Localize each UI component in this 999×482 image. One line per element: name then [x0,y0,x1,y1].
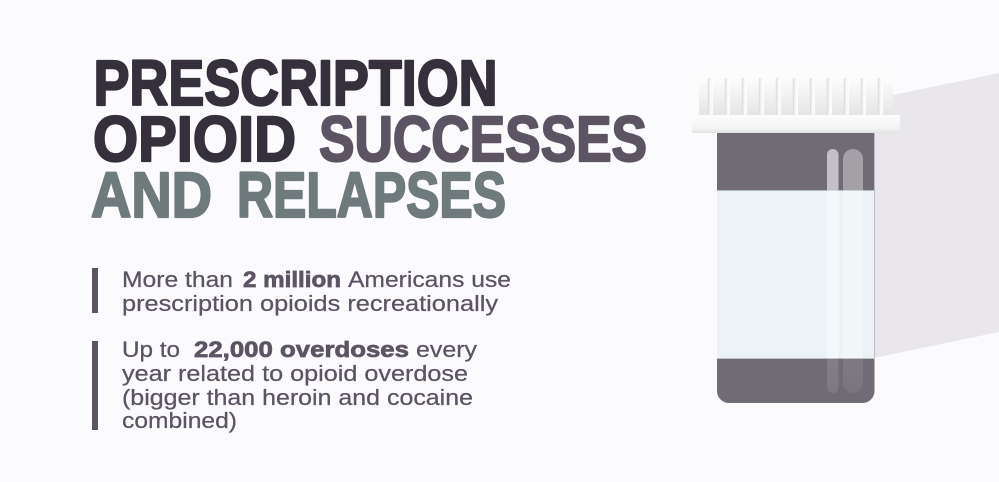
title [91,47,647,231]
fact text: Up to [122,337,180,362]
fact text: 22,000 overdoses [194,337,409,362]
title: SUCCESSES [319,103,647,175]
title: OPIOID [93,103,296,175]
title: AND [91,159,212,231]
fact: 22,000 overdoses [92,337,477,433]
cap [692,66,900,133]
bottle shadow [874,73,999,358]
fact text [122,337,477,433]
accent bar [92,341,98,430]
fact text: combined) [122,408,237,433]
fact text: More than [122,267,233,292]
bottle highlights [827,149,863,393]
fact text [122,267,511,316]
fact text: every [416,337,477,362]
title: RELAPSES [237,159,506,231]
bottle body [717,133,874,403]
fact text: Americans use [348,267,511,292]
cap top [699,66,893,115]
fact: 2 million Americans [92,267,511,316]
cap ring [692,115,900,133]
label [717,190,874,358]
fact text: prescription opioids recreationally [122,291,498,316]
fact text: year related to opioid overdose [122,361,468,386]
cap ridges [707,78,883,115]
accent bar [92,268,98,313]
title: PRESCRIPTION [94,47,498,119]
fact text: 2 million [243,267,341,292]
icon: pill bottle [692,66,900,403]
fact text: (bigger than heroin and cocaine [122,385,473,410]
